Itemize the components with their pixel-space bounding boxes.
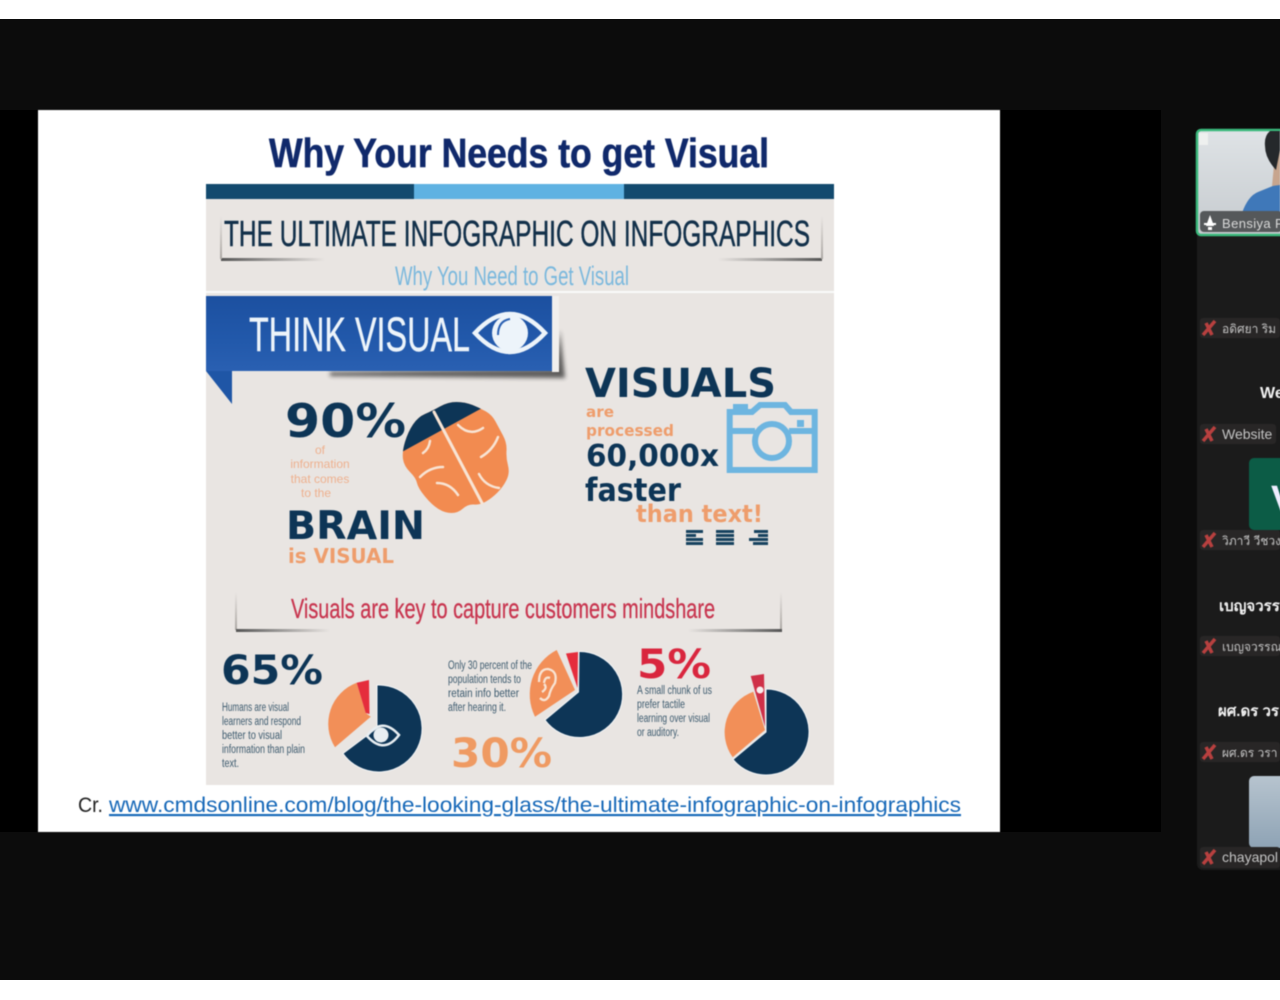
stat: 5 percent: or auditory. [637, 727, 679, 739]
icon: text alignment glyphs [686, 530, 768, 545]
slide [38, 110, 1000, 832]
infographic heading: THE ULTIMATE INFOGRAPHIC ON INFOGRAPHICS [224, 213, 810, 254]
name tag: Wipaporn: วิภาวี วีชวง [1222, 534, 1280, 548]
icon: camera [730, 404, 815, 470]
name tag: Adisaya [1200, 318, 1280, 338]
stat: 65 percent [221, 648, 323, 770]
think visual banner: THINK VISUAL [249, 309, 470, 362]
name tag: Website: Website [1222, 426, 1273, 442]
pie chart: 5 percent [725, 674, 809, 775]
think visual banner [206, 296, 565, 404]
stat: 65 percent: Humans are visual [222, 702, 289, 714]
name tag: Asst Prof: ผศ.ดร วรา [1222, 746, 1277, 760]
participant panel [1197, 130, 1280, 870]
stat: 90 percent brain: of [315, 443, 326, 457]
stat: 90 percent brain: information [290, 457, 350, 471]
participant name: Benjawan: เบญจวรร [1219, 598, 1280, 615]
stat: 90 percent brain: BRAIN [286, 504, 425, 549]
source credit: www.cmdsonline.com/blog/the-looking-glass/the-ultimate-infographic-on-infographics [108, 793, 961, 817]
stat: 65 percent: information than plain [222, 744, 305, 756]
stat: 5 percent: 5% [637, 642, 711, 688]
mindshare heading: Visuals are key to capture customers mindshare [291, 593, 715, 624]
stat: 5 percent: A small chunk of us [637, 685, 712, 697]
name tag: Wipaporn [1200, 530, 1280, 550]
name tag: chayapol [1200, 847, 1280, 868]
participant photo: chayapol [1249, 776, 1280, 848]
name tag: Adisaya: อดิศยา ริม [1222, 322, 1276, 336]
participant avatar: green [1249, 458, 1280, 530]
participant video: Bensiya [1197, 130, 1280, 235]
stat: 65 percent: better to visual [222, 730, 282, 742]
header ribbon [220, 216, 823, 261]
pie chart: 65 percent [328, 680, 422, 772]
stat: visuals 60,000x faster: faster [585, 471, 681, 509]
name tag: Benjawan [1200, 636, 1280, 656]
stat: 90 percent brain: to the [301, 486, 331, 500]
icon: ear [539, 669, 556, 700]
stat: 90 percent brain: that comes [291, 472, 349, 486]
name tag: Website [1200, 424, 1276, 444]
stat: 30 percent: population tends to [448, 674, 521, 686]
stat: visuals 60,000x faster: are [586, 403, 614, 421]
stat: 5 percent: learning over visual [637, 713, 710, 725]
mindshare ribbon [235, 592, 782, 632]
icon: eye [475, 314, 545, 352]
stat: 90 percent brain: is VISUAL [288, 544, 394, 568]
stat: 30 percent [448, 660, 552, 777]
stat: 90 percent brain: 90% [285, 394, 406, 448]
stat: 30 percent: after hearing it. [448, 702, 506, 714]
stat: 65 percent: 65% [221, 648, 323, 694]
name tag: chayapol: chayapol [1222, 849, 1278, 865]
stat: 65 percent: learners and respond [222, 716, 301, 728]
name tag: Benjawan: เบญจวรรณ [1222, 640, 1280, 654]
stat: 90 percent brain [285, 394, 425, 568]
stat: 5 percent: prefer tactile [637, 699, 685, 711]
stat: 30 percent: retain info better [448, 688, 519, 700]
source credit: Cr. [78, 794, 103, 817]
stat: visuals 60,000x faster: processed [586, 421, 674, 440]
stat: visuals 60,000x faster: 60,000x [586, 439, 719, 474]
icon: brain [403, 402, 509, 513]
slide title: Why Your Needs to get Visual [269, 130, 769, 176]
name tag: Asst Prof [1200, 742, 1280, 762]
stat: visuals 60,000x faster: VISUALS [585, 361, 776, 407]
stat: visuals 60,000x faster [585, 361, 776, 528]
stat: 5 percent [637, 642, 712, 739]
stat: 65 percent: text. [222, 758, 239, 770]
stat: 30 percent: 30% [451, 731, 552, 777]
stat: 30 percent: Only 30 percent of the [448, 660, 532, 672]
infographic subtitle: Why You Need to Get Visual [395, 261, 629, 291]
pie chart: 30 percent [530, 650, 623, 737]
stat: visuals 60,000x faster: than text! [636, 500, 763, 528]
participant name: Asst Prof: ผศ.ดร วร [1218, 703, 1280, 720]
icon: eye on pie [367, 726, 399, 745]
shared screen black area [0, 110, 1161, 832]
infographic panel [206, 184, 834, 785]
